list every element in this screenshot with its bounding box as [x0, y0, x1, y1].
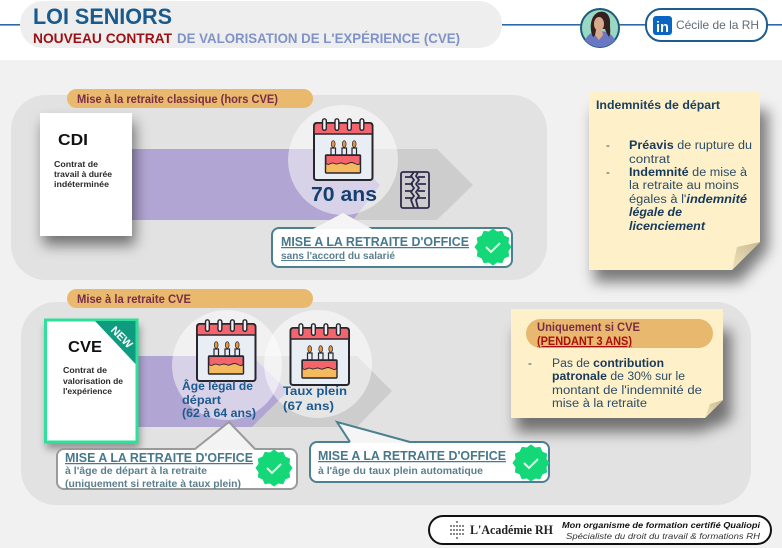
- panel: CVE retirement: [21, 289, 751, 505]
- icon: birthday calendar: [314, 119, 372, 180]
- arrow: purple timeline: [132, 149, 380, 220]
- callout: retirement at legal age: MISE A LA RETRAITE D'OFFICE: [65, 451, 253, 465]
- note: CVE only: [511, 309, 731, 432]
- subtitle: NOUVEAU CONTRAT: [33, 30, 172, 46]
- age 70: 70 ans: [311, 184, 377, 206]
- note pill: Uniquement si CVE: [537, 322, 640, 334]
- linkedin badge: [646, 9, 767, 41]
- note list: mise à la retraite: [552, 398, 647, 410]
- card: CDI: travail à durée: [54, 169, 112, 179]
- ribbon: new: NEW: [108, 324, 135, 351]
- callout: retirement at full rate: MISE A LA RETRAITE D'OFFICE: [318, 449, 506, 463]
- icon: check badge: [256, 450, 292, 486]
- note heading: Indemnités de départ: [596, 100, 720, 112]
- footer: training organisation: [429, 516, 771, 544]
- callout: retirement at legal age: à l'âge de départ à la retraite: [65, 466, 207, 477]
- callout: retirement at full rate: à l'âge du taux plein automatique: [318, 466, 483, 477]
- card: CDI: Contrat de: [54, 159, 98, 169]
- note list: patronale de 30% sur le: [552, 371, 685, 383]
- subtitle: DE VALORISATION DE L'EXPÉRIENCE (CVE): [177, 30, 460, 46]
- legal age text: Âge légal de: [182, 378, 253, 393]
- icon: linkedin: in: [656, 19, 669, 36]
- highlight circle: [288, 105, 398, 215]
- note list: égales à l' indemnité: [629, 194, 748, 206]
- note list: Pas de contribution: [552, 358, 664, 370]
- full rate text: Taux plein: [283, 384, 347, 398]
- card: CDI: indéterminée: [54, 179, 109, 189]
- card: CVE: valorisation de: [63, 376, 123, 386]
- highlight circle: legal age: [172, 310, 282, 420]
- callout: forced retirement without consent: [272, 213, 512, 267]
- callout: forced retirement without consent: sans l'accord du salarié: [281, 251, 395, 262]
- footer tagline: Mon organisme de formation certifié Qualiopi: [562, 520, 761, 530]
- note list: Indemnité de mise à: [629, 167, 748, 179]
- academy name: L'Académie RH: [470, 522, 553, 537]
- note list: -: [528, 358, 532, 370]
- icon: academy logo: [450, 521, 464, 539]
- note: severance: [589, 92, 768, 282]
- card: CDI: [40, 113, 135, 245]
- icon: check badge: [475, 229, 511, 265]
- title: LOI SENIORS: [33, 4, 172, 29]
- note list: licenciement: [629, 221, 706, 233]
- note list: -: [606, 140, 610, 152]
- label: classic retirement: Mise à la retraite classique (hors CVE): [77, 94, 278, 106]
- note list: [606, 140, 752, 233]
- note list: contrat: [629, 154, 671, 166]
- note list: montant de l'indemnité de: [552, 385, 702, 397]
- label: CVE retirement: [67, 289, 313, 308]
- legal age text: (62 à 64 ans): [182, 406, 256, 420]
- arrow: grey timeline: [240, 356, 392, 427]
- legal age text: départ: [182, 393, 221, 407]
- icon: document: [401, 172, 429, 208]
- note pill: (PENDANT 3 ANS): [537, 336, 632, 348]
- header band: [0, 0, 782, 60]
- note list: légale de: [629, 207, 683, 219]
- highlight circle: full rate: [264, 310, 372, 418]
- linkedin name: Cécile de la RH: [676, 18, 759, 32]
- footer specialty: Spécialiste du droit du travail & formations RH: [566, 531, 761, 541]
- card: CVE: [46, 320, 140, 449]
- icon: author portrait: [581, 9, 619, 47]
- callout: retirement at legal age: (uniquement si retraite à taux plein): [65, 479, 241, 490]
- note pill: [526, 319, 713, 348]
- label: CVE retirement: Mise à la retraite CVE: [77, 294, 191, 306]
- full rate text: (67 ans): [283, 399, 334, 413]
- note list: la retraite au moins: [629, 180, 739, 192]
- title block: [20, 1, 502, 48]
- icon: birthday calendar legal age: [197, 320, 256, 381]
- icon: birthday calendar full rate: [290, 324, 349, 385]
- note list: Préavis de rupture du: [629, 140, 752, 152]
- card: CVE: l'expérience: [63, 386, 112, 396]
- card: CDI: CDI: [58, 132, 88, 149]
- arrow: grey timeline: [320, 149, 473, 220]
- panel: classic retirement: [11, 89, 547, 280]
- arrow: purple timeline: [138, 356, 288, 427]
- note list: [528, 358, 702, 410]
- card: CVE: Contrat de: [63, 365, 107, 375]
- callout: retirement at full rate: [310, 422, 549, 482]
- callout: forced retirement without consent: MISE A LA RETRAITE D'OFFICE: [281, 235, 469, 249]
- note list: -: [606, 167, 610, 179]
- callout: retirement at legal age: [57, 422, 297, 490]
- label: classic retirement: [67, 89, 313, 108]
- icon: check badge: [513, 445, 549, 481]
- card: CVE: CVE: [68, 339, 102, 356]
